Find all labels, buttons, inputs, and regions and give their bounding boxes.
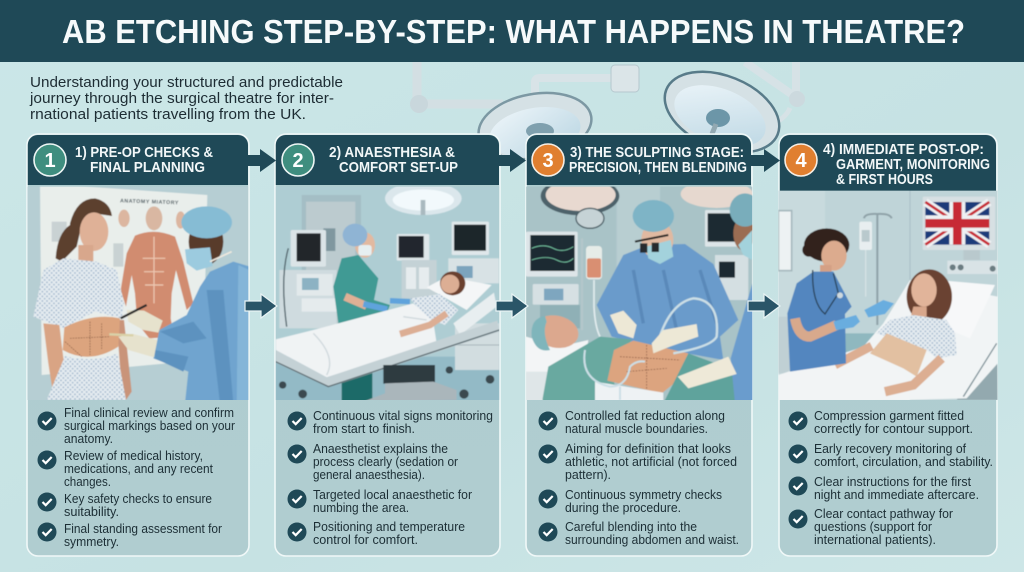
step 1 checklist: anatomy.	[64, 431, 113, 446]
step 2 header: 2	[292, 150, 304, 172]
intro text: Understanding your structured and predictable	[30, 74, 343, 91]
step 1 header: FINAL PLANNING	[90, 160, 205, 176]
step 4 header: & FIRST HOURS	[836, 172, 933, 188]
panel: step 3 sculpting	[526, 134, 760, 556]
step 1 header	[28, 135, 248, 185]
step 3 checklist: Continuous symmetry checks	[565, 487, 722, 502]
check icons	[538, 412, 558, 542]
icon: UK flag on monitor	[923, 197, 995, 250]
step 3 header: 3	[542, 150, 554, 172]
step 2 checklist: control for comfort.	[313, 532, 418, 547]
step 2 checklist: Continuous vital signs monitoring	[313, 408, 493, 423]
step 1 checklist: changes.	[64, 474, 111, 489]
step 3 header	[527, 135, 751, 185]
step 4 checklist: Compression garment fitted	[814, 408, 964, 423]
step 2 checklist: Anaesthetist explains the	[313, 441, 448, 456]
check icons	[38, 412, 56, 542]
step 4 checklist: Clear contact pathway for	[814, 506, 954, 521]
step 2 header	[276, 135, 499, 185]
image: recovery room with nurse and patient	[778, 190, 998, 403]
step 4 checklist: questions (support for	[814, 519, 933, 534]
step 3 header: PRECISION, THEN BLENDING	[569, 160, 747, 176]
step 4 checklist: comfort, circulation, and stability.	[814, 454, 993, 469]
step 3 checklist: Careful blending into the	[565, 519, 697, 534]
step 4 checklist: night and immediate aftercare.	[814, 487, 979, 502]
step 3 checklist: during the procedure.	[565, 500, 681, 515]
step 4 checklist	[788, 408, 993, 547]
step 2 checklist: numbing the area.	[313, 500, 409, 515]
step 4 checklist: correctly for contour support.	[814, 421, 973, 436]
image: patient markings with clinician: ANATOMY MIATORY	[120, 198, 179, 206]
step 1 checklist: Key safety checks to ensure	[64, 491, 212, 506]
step 1 checklist: suitability.	[64, 504, 119, 519]
step 1 checklist: symmetry.	[64, 534, 119, 549]
arrows between header bars	[248, 149, 780, 172]
background surgical lights	[410, 56, 805, 168]
step 3 checklist: athletic, not artificial (not forced	[565, 454, 737, 469]
step 3 checklist: pattern).	[565, 467, 611, 482]
step 1 checklist: Review of medical history,	[64, 448, 203, 463]
step 2 checklist	[288, 408, 493, 547]
check icons	[288, 412, 306, 542]
step 1 checklist: medications, and any recent	[64, 461, 213, 476]
intro text: rnational patients travelling from the UK.	[30, 106, 306, 123]
step 2 checklist: Targeted local anaesthetic for	[313, 487, 473, 502]
step 3 checklist: Controlled fat reduction along	[565, 408, 725, 423]
image: patient markings with clinician	[27, 183, 250, 403]
intro text: journey through the surgical theatre for inter-	[29, 90, 334, 107]
header banner	[0, 0, 1024, 62]
intro text	[29, 74, 343, 123]
step 4 checklist: Clear instructions for the first	[814, 474, 971, 489]
step 1 header: 1) PRE-OP CHECKS &	[75, 145, 213, 161]
title: AB ETCHING STEP-BY-STEP: WHAT HAPPENS IN THEATRE?	[62, 14, 965, 51]
step 1 checklist: Final clinical review and confirm	[64, 405, 234, 420]
step 4 checklist: Early recovery monitoring of	[814, 441, 966, 456]
image: surgeon performing procedure	[526, 177, 760, 403]
step 4 checklist: international patients).	[814, 532, 936, 547]
step 3 checklist	[538, 408, 739, 547]
step 2 header: COMFORT SET-UP	[339, 160, 458, 176]
panel: step 4 post-op	[778, 134, 998, 556]
step 2 checklist: Positioning and temperature	[313, 519, 465, 534]
step 3 header: 3) THE SCULPTING STAGE:	[570, 145, 744, 161]
image: anaesthesia room with nurse and patient	[276, 182, 499, 403]
step 4 header	[780, 135, 996, 191]
step 1 checklist: Final standing assessment for	[64, 521, 223, 536]
step 1 header: 1	[44, 150, 56, 172]
check icons	[788, 412, 808, 528]
step 2 checklist: process clearly (sedation or	[313, 454, 459, 469]
step 4 header: 4	[795, 150, 807, 172]
step 2 header: 2) ANAESTHESIA &	[329, 145, 455, 161]
step 3 checklist: surrounding abdomen and waist.	[565, 532, 739, 547]
step 3 checklist: Aiming for definition that looks	[565, 441, 731, 456]
step 1 checklist	[38, 405, 236, 549]
step 2 checklist: from start to finish.	[313, 421, 415, 436]
step 3 checklist: natural muscle boundaries.	[565, 421, 708, 436]
step 4 header: GARMENT, MONITORING	[836, 157, 990, 173]
step 4 header: 4) IMMEDIATE POST-OP:	[823, 142, 984, 158]
arrows between images	[245, 294, 780, 318]
panel: step 2 anaesthesia	[275, 134, 500, 556]
step 2 checklist: general anaesthesia).	[313, 467, 425, 482]
step 1 checklist: surgical markings based on your	[64, 418, 236, 433]
panel: step 1 pre-op checks	[27, 134, 250, 556]
